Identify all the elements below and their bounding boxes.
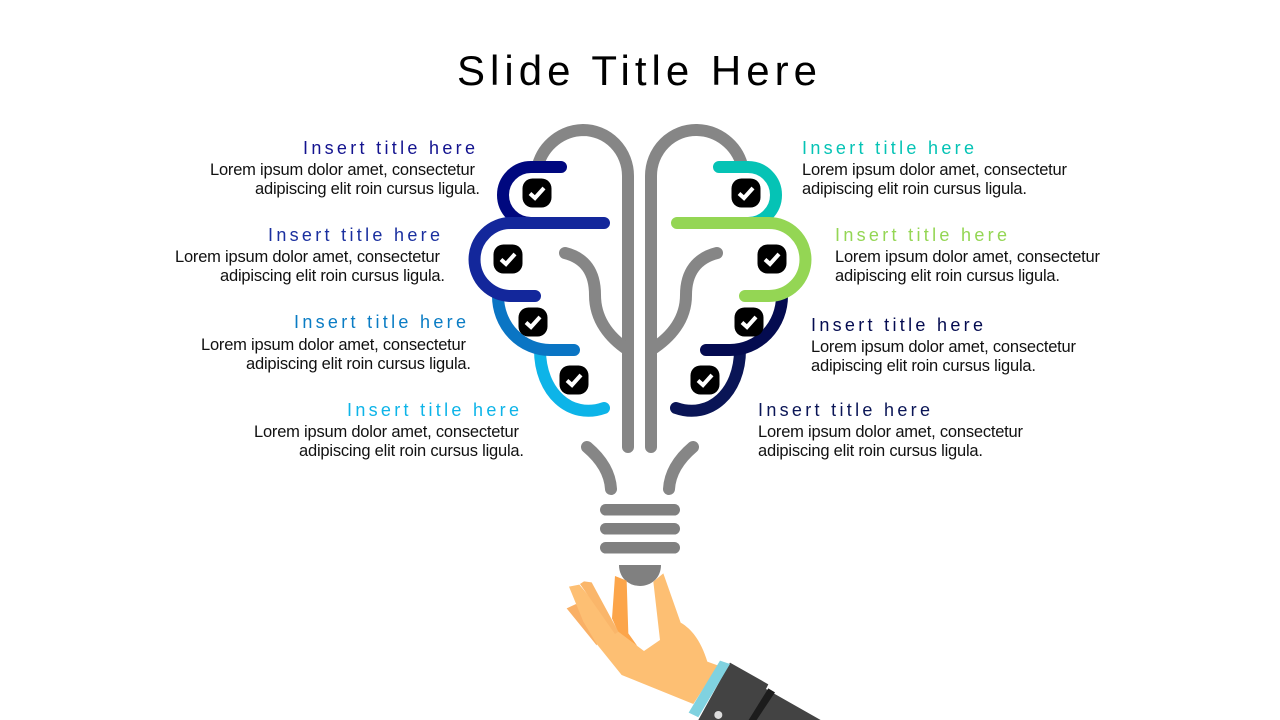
sleeve band [749, 688, 775, 720]
middle finger shade [580, 581, 618, 634]
icon: check 1 [522, 178, 552, 208]
right dark navy lobe [706, 296, 782, 350]
text block: left 2 [175, 225, 445, 285]
text block: left 2: Insert title here [268, 225, 443, 245]
text block: left 3 [201, 312, 471, 373]
text block: left 1: adipiscing elit roin cursus ligula. [255, 180, 480, 198]
text block: left 3: Insert title here [294, 312, 469, 332]
text block: left 1: Insert title here [303, 138, 478, 158]
icon: check 3 [518, 308, 548, 336]
text block: right 1: adipiscing elit roin cursus ligula. [802, 180, 1027, 198]
text block: left 4: adipiscing elit roin cursus ligula. [299, 442, 524, 460]
text block: right 4: adipiscing elit roin cursus ligula. [758, 442, 983, 460]
royal blue lobe [475, 223, 604, 296]
jacket sleeve [698, 663, 821, 720]
title: Slide Title Here [457, 47, 817, 94]
text block: right 2: Lorem ipsum dolor amet, consectetur [835, 248, 1100, 266]
text block: right 2 [835, 225, 1100, 285]
text block: left 1: Lorem ipsum dolor amet, consectetur [210, 161, 476, 179]
text block: right 3: adipiscing elit roin cursus ligula. [811, 357, 1036, 375]
bulb base [600, 504, 680, 586]
text block: left 2: Lorem ipsum dolor amet, consectetur [175, 248, 440, 266]
mid blue lobe [498, 296, 574, 350]
icon: check 2 [494, 244, 522, 274]
green lobe [677, 223, 805, 296]
text block: right 2: adipiscing elit roin cursus ligula. [835, 267, 1060, 285]
icon: check 7 [734, 308, 764, 336]
text block: left 3: Lorem ipsum dolor amet, consectetur [201, 336, 466, 354]
right bulb neck curve [669, 447, 693, 489]
back finger [567, 604, 600, 645]
text block: left 2: adipiscing elit roin cursus ligula. [220, 267, 445, 285]
right hemisphere grey line [651, 130, 742, 447]
cuff [689, 661, 730, 717]
check icons [494, 178, 786, 394]
brain and bulb outline [475, 130, 805, 489]
text block: right 1: Lorem ipsum dolor amet, consectetur [802, 161, 1068, 179]
text block: right 1: Insert title here [802, 138, 977, 158]
text block: right 4: Insert title here [758, 400, 933, 420]
icon: check 6 [758, 244, 786, 274]
text block: right 3 [811, 315, 1076, 375]
folded finger [612, 576, 637, 646]
text block: left 1 [210, 138, 480, 198]
text block: left 4 [254, 400, 524, 460]
right bottom navy lobe [676, 350, 740, 411]
cyan lobe [540, 350, 604, 411]
text block: left 4: Insert title here [347, 400, 522, 420]
left bulb neck curve [587, 447, 611, 489]
right inner branch [651, 253, 717, 350]
text block: right 1 [802, 138, 1068, 198]
text block: right 4 [758, 400, 1024, 460]
text block: right 4: Lorem ipsum dolor amet, consectetur [758, 423, 1024, 441]
text block: right 3: Insert title here [811, 315, 986, 335]
hand [569, 573, 718, 704]
hand and sleeve [567, 573, 821, 720]
text block: right 2: Insert title here [835, 225, 1010, 245]
button [714, 711, 722, 719]
text block: left 3: adipiscing elit roin cursus ligula. [246, 355, 471, 373]
icon: check 5 [732, 178, 760, 208]
teal lobe [719, 167, 776, 223]
text block: right 3: Lorem ipsum dolor amet, consectetur [811, 338, 1076, 356]
text block: left 4: Lorem ipsum dolor amet, consectetur [254, 423, 520, 441]
dark navy lobe [503, 167, 561, 223]
left inner branch [565, 253, 628, 350]
icon: check 4 [560, 366, 588, 394]
left hemisphere grey line [538, 130, 628, 447]
icon: check 8 [690, 366, 720, 394]
